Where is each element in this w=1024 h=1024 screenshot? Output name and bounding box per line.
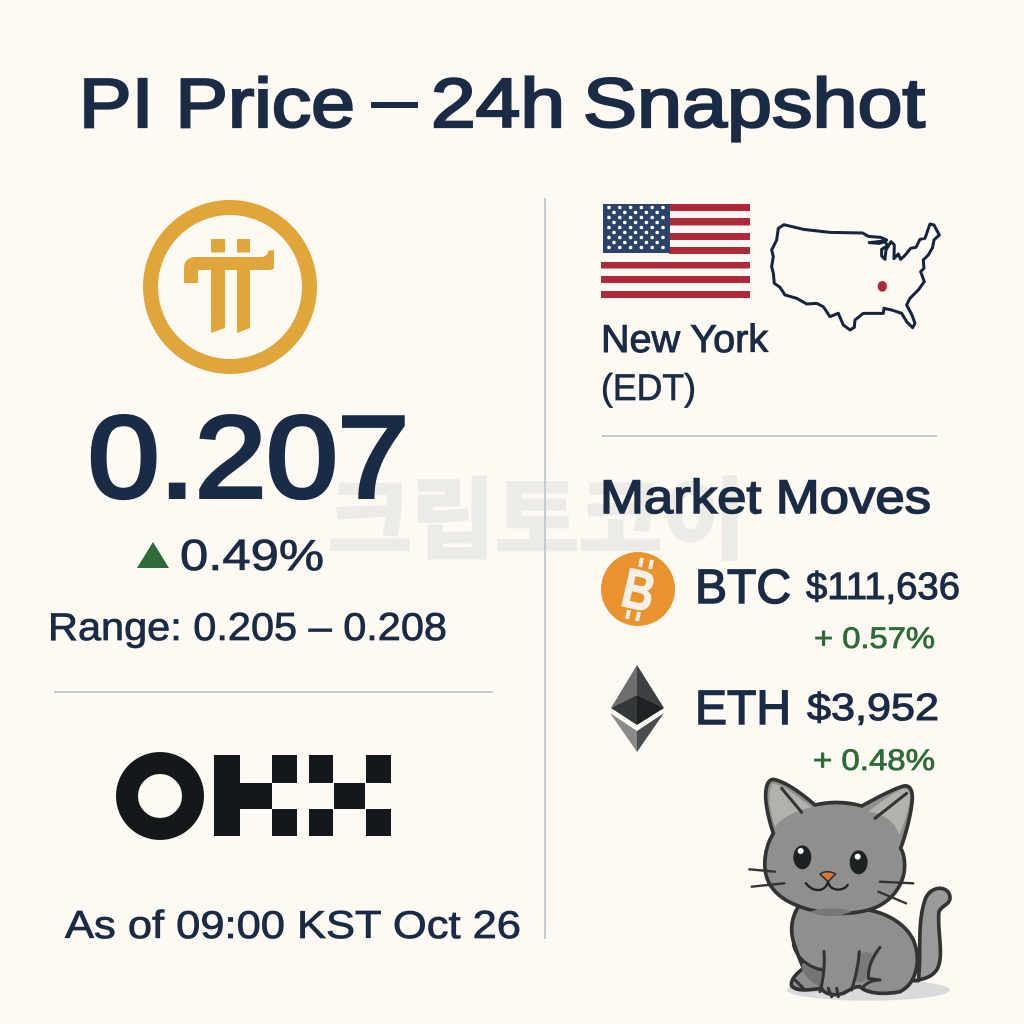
icon: US map outline — [772, 224, 939, 330]
price value: 0.207 — [88, 392, 409, 522]
kitten face — [749, 845, 913, 903]
title: Snapshot — [583, 64, 925, 142]
title — [79, 64, 925, 142]
title: 24h — [431, 64, 565, 142]
timestamp: As of 09:00 KST Oct 26 — [65, 904, 521, 947]
price range: Range: 0.205 – 0.208 — [48, 606, 447, 649]
ETH ticker: ETH — [695, 682, 791, 735]
icon: Bitcoin: B — [616, 555, 662, 624]
icon: up triangle — [137, 542, 169, 568]
panel: PI price — [48, 200, 447, 649]
city label: New York — [601, 318, 769, 361]
change percent: 0.49% — [180, 531, 324, 580]
timezone label: (EDT) — [601, 367, 696, 408]
icon: Ethereum — [610, 665, 664, 752]
ETH price: $3,952 — [807, 687, 939, 729]
map marker — [878, 281, 887, 292]
icon: Bitcoin — [601, 552, 675, 626]
BTC change: + 0.57% — [814, 622, 935, 655]
panel: market moves — [600, 470, 960, 777]
watermark: 크립토코이 — [328, 471, 746, 570]
icon: Pi coin logo — [143, 200, 317, 374]
icon: OKX logo — [127, 755, 391, 836]
panel: location — [601, 204, 939, 408]
ETH change: + 0.48% — [813, 744, 935, 777]
BTC ticker: BTC — [695, 561, 791, 614]
icon: grey kitten mascot — [749, 779, 950, 1001]
price change — [137, 531, 324, 580]
icon: US flag — [601, 204, 750, 298]
section heading: Market Moves — [600, 470, 931, 523]
BTC price: $111,636 — [806, 566, 960, 608]
title: PI Price — [79, 64, 355, 142]
